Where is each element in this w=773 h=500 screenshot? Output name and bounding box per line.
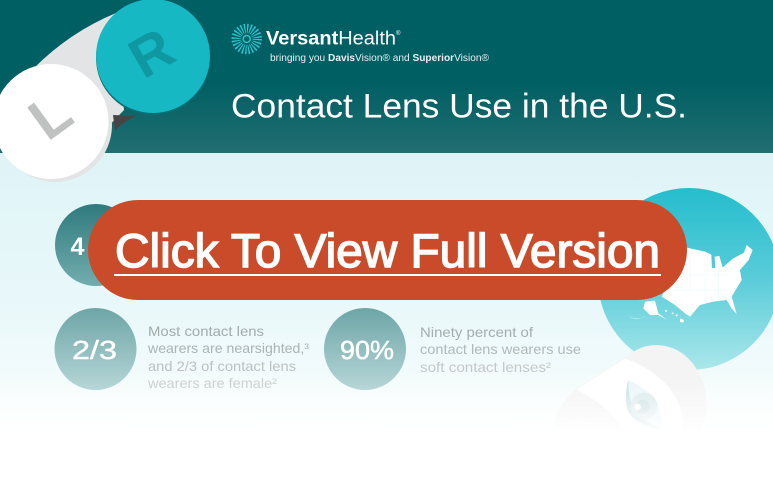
icon: sunburst — [236, 28, 257, 50]
left lens — [0, 64, 112, 182]
tagline: bringing you DavisVision® and SuperiorVision® — [270, 52, 489, 64]
text: nearsighted and female wearers: wearers are nearsighted,³ — [147, 340, 309, 356]
registered mark: ® — [396, 30, 401, 37]
brand name: VersantHealth — [266, 28, 396, 50]
logo: Versant Health — [236, 28, 489, 64]
button: click to view full version: Click To View Full Version — [115, 225, 660, 278]
bottom fade overlay — [0, 378, 773, 435]
text: soft contact lenses: Ninety percent of — [420, 324, 533, 340]
stat: two thirds circle — [54, 308, 136, 390]
stat: first circle: 4 — [70, 233, 84, 261]
text: soft contact lenses: soft contact lenses² — [420, 359, 551, 375]
text: soft contact lenses — [420, 324, 581, 375]
text: nearsighted and female wearers: Most contact lens — [148, 323, 264, 339]
left lens: L — [17, 79, 84, 153]
icon: eye illustration — [540, 345, 707, 452]
case body — [34, 13, 124, 135]
stat: first circle — [55, 204, 137, 286]
right lens — [96, 0, 210, 115]
right lens: R — [118, 15, 185, 90]
page background — [0, 153, 773, 500]
globe circle — [598, 188, 773, 370]
text: nearsighted and female wearers: and 2/3 of contact lens — [148, 358, 296, 374]
stat: ninety percent circle: 90% — [340, 335, 394, 365]
eye — [626, 380, 664, 431]
text: nearsighted and female wearers — [147, 323, 309, 391]
title: Contact Lens Use in the U.S. — [231, 88, 687, 126]
text: soft contact lenses: contact lens wearers use — [420, 341, 581, 357]
stat: ninety percent circle — [324, 308, 406, 390]
header band — [0, 0, 773, 153]
stat: two thirds circle: 2/3 — [72, 335, 117, 365]
case hinge shadow — [113, 115, 137, 131]
icon: contact lens case — [0, 0, 210, 182]
text: nearsighted and female wearers: wearers are female² — [147, 375, 277, 391]
button: click to view full version — [88, 200, 687, 300]
icon: US map — [627, 245, 753, 323]
globe with US map — [598, 188, 773, 370]
head shape — [550, 345, 707, 450]
